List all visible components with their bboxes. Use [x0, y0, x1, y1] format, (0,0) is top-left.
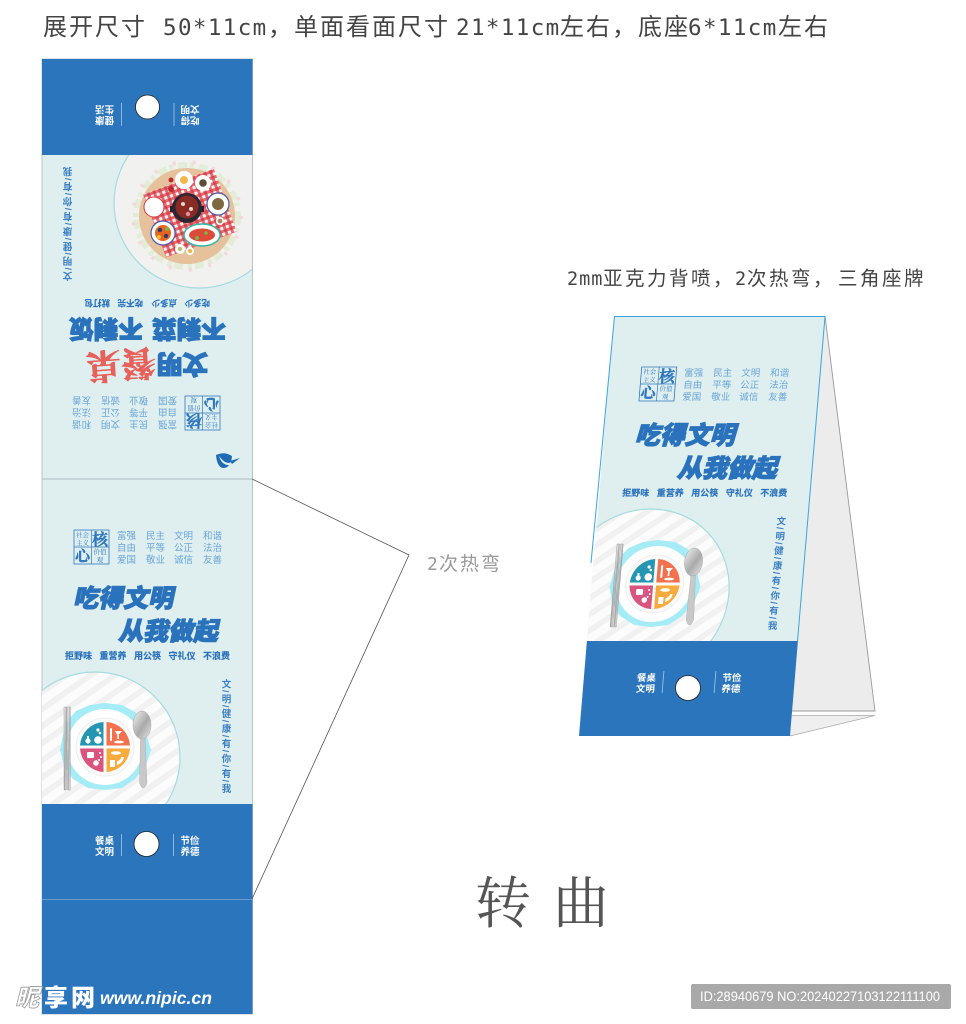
values list: 自由: [683, 379, 703, 391]
title: [630, 421, 786, 483]
fold line: middle: [42, 478, 252, 480]
band: top blue: [42, 59, 252, 155]
sub slogans: 点多少: [151, 298, 177, 308]
sub slogans: 拒野味: [65, 650, 92, 661]
slogan: no leftovers: 不剩菜: [152, 314, 226, 343]
sub slogans: 守礼仪: [168, 650, 196, 661]
upside-down panel content: [63, 166, 226, 430]
lower band text: right: [180, 835, 200, 858]
title: 吃得文明: [633, 421, 741, 450]
values list: 敬业: [711, 391, 731, 403]
page heading: [43, 14, 830, 41]
fold label: 次热弯: [439, 553, 502, 575]
seal: core values: 社会: [643, 367, 657, 376]
band text: left: [635, 672, 657, 695]
stand: base: [790, 715, 875, 736]
seal: core values: 观: [97, 555, 104, 564]
vertical slogan: 文/明/健/康/有/你/有/我: [765, 515, 787, 631]
watermark: ID box: [691, 984, 951, 1009]
sub slogans: 就打包: [84, 298, 110, 308]
watermark: site logo: 网: [71, 985, 95, 1012]
seal: core values: 心: [75, 548, 92, 565]
values list: 民主: [713, 367, 733, 379]
page heading: 21*11cm: [456, 15, 561, 41]
title: 从我做起: [117, 618, 223, 646]
top band text: right: [180, 103, 200, 126]
sub slogans: 不浪费: [203, 650, 230, 661]
values list: [117, 530, 223, 566]
values list: 法治: [203, 542, 222, 554]
band text: left: 文明: [635, 683, 655, 695]
sub slogans: [622, 487, 788, 498]
values list: 法治: [769, 379, 789, 391]
title: wenming: 文明: [157, 349, 208, 378]
watermark: site logo: 享: [44, 984, 68, 1012]
title: [72, 584, 223, 646]
values list: 友善: [203, 554, 223, 566]
seal: core values: 核: [92, 530, 110, 549]
stand: front face: [547, 316, 825, 736]
values list: 富强: [157, 418, 177, 430]
sub slogans: 不浪费: [760, 487, 788, 498]
values list: 和谐: [770, 368, 790, 379]
lower band text: right: 养德: [180, 846, 200, 858]
vertical slogan: 文/明/健/康/有/你/有/我: [63, 166, 74, 282]
top band text: right: 吃得: [180, 114, 200, 126]
arrow: fold lines: [252, 479, 409, 899]
band text: right: 节俭: [722, 672, 742, 684]
logo: bird: [216, 453, 240, 468]
page heading: 底座: [638, 14, 690, 41]
top band text: right: 文明: [180, 103, 200, 115]
page heading: ，: [268, 14, 294, 41]
fold line: base: [42, 898, 252, 900]
watermark: ID box: ID:28940679 NO:20240227103122111100: [700, 988, 940, 1004]
values list: 公正: [174, 543, 194, 554]
page heading: 展开尺寸: [43, 14, 147, 41]
values list: 公正: [100, 406, 120, 417]
values list: 友善: [71, 394, 91, 406]
values list: 法治: [72, 406, 91, 418]
band text: right: 养德: [721, 683, 741, 695]
stand: back panel: [791, 316, 875, 711]
band text: right: [721, 672, 742, 695]
sub slogans: [84, 298, 210, 308]
values list: 爱国: [117, 554, 136, 566]
top band text: left: 生活: [94, 103, 114, 115]
page heading: 50*11cm: [163, 15, 268, 41]
seal: core values: 社会: [204, 421, 218, 430]
seal: core values: 核: [658, 367, 678, 386]
seal: core values: 观: [190, 396, 197, 405]
sub slogans: 守礼仪: [725, 487, 753, 498]
seal: core values: [74, 530, 110, 565]
values list: [71, 394, 177, 430]
material note: 2: [735, 269, 747, 290]
hole: top: [136, 95, 160, 119]
seal: core values: [184, 395, 220, 430]
title: 从我做起: [675, 455, 783, 483]
values list: 平等: [712, 379, 732, 391]
values list: 平等: [128, 406, 148, 418]
band dividers: [662, 671, 716, 693]
values list: 平等: [146, 542, 166, 554]
title: canzhuo calligraphy: 餐桌: [85, 342, 157, 386]
values list: 公正: [740, 380, 760, 391]
values list: 诚信: [739, 391, 759, 403]
lower band text: left: 餐桌: [95, 835, 115, 847]
lower band dividers: [122, 834, 174, 856]
values list: 爱国: [158, 394, 177, 406]
seal: core values: [639, 367, 678, 402]
top band text: left: 健康: [94, 114, 114, 126]
front panel content: [10, 530, 231, 842]
values list: 文明: [101, 418, 120, 430]
hole: lower: [134, 832, 159, 856]
seal: core values: 价值: [187, 404, 200, 413]
values list: 友善: [768, 391, 788, 403]
slogan: no leftovers: [69, 314, 226, 343]
material note: 三角座牌: [838, 268, 926, 290]
watermark: site logo: www.nipic.cn: [100, 988, 212, 1008]
values list: 爱国: [682, 391, 702, 403]
lower band text: left: 文明: [95, 846, 114, 858]
band: lower blue: [42, 804, 252, 1014]
watermark: site logo: [15, 984, 212, 1012]
material note: [567, 268, 926, 290]
sub slogans: 用公筷: [691, 487, 719, 498]
title: 吃得文明: [72, 584, 178, 613]
band text: left: 餐桌: [636, 672, 657, 684]
values list: 文明: [741, 367, 761, 379]
values list: 民主: [146, 530, 165, 542]
hole: stand: [676, 676, 700, 700]
sub slogans: 重营养: [656, 487, 684, 498]
values list: 文明: [174, 530, 193, 542]
page heading: 单面看面尺寸: [294, 14, 450, 41]
seal: core values: 价值: [659, 384, 673, 393]
seal: core values: 观: [662, 392, 669, 401]
values list: 富强: [684, 367, 704, 379]
page heading: 左右，: [560, 14, 638, 41]
values list: 和谐: [71, 418, 91, 429]
seal: core values: 核: [184, 411, 202, 430]
lower band text: right: 节俭: [180, 835, 200, 847]
top band text: left: [94, 103, 114, 126]
page heading: 6*11cm: [688, 15, 778, 41]
values list: 诚信: [174, 554, 193, 566]
values list: 富强: [117, 530, 137, 542]
slogan: no leftovers: 不剩饭: [69, 314, 143, 343]
sub slogans: 吃多少: [184, 298, 210, 308]
top band dividers: [122, 103, 174, 126]
watermark: site logo: 昵: [15, 985, 43, 1012]
seal: core values: 主义: [642, 375, 657, 384]
values list: 和谐: [203, 531, 223, 542]
mockup: triangular table stand: [547, 316, 875, 736]
seal: core values: 社会: [76, 530, 90, 539]
material note: 2mm: [567, 269, 603, 290]
sub slogans: 吃不完: [117, 298, 143, 308]
outline label: 转曲: [475, 874, 631, 936]
page heading: 左右: [778, 14, 830, 41]
values list: 自由: [117, 542, 136, 554]
seal: core values: 心: [202, 395, 219, 412]
plate: picnic table illustration: [113, 155, 252, 289]
values list: 敬业: [129, 394, 148, 406]
values list: 诚信: [101, 394, 120, 406]
fold label: 2: [427, 554, 438, 575]
material note: 亚克力背喷，: [603, 268, 735, 290]
panel: flat unfolded strip: [42, 58, 253, 1014]
lower band text: left: [95, 835, 115, 858]
seal: core values: 主义: [76, 538, 90, 547]
values list: 敬业: [146, 554, 165, 566]
values list: 民主: [129, 418, 148, 430]
sub slogans: 重营养: [100, 650, 127, 661]
plate: place setting: [552, 509, 736, 679]
seal: core values: 主义: [204, 413, 218, 422]
vertical slogan: 文/明/健/康/有/你/有/我: [220, 678, 231, 794]
stand: light blue edge: [591, 316, 825, 641]
values list: 自由: [158, 406, 177, 418]
sub slogans: 拒野味: [622, 487, 650, 498]
plate: place setting: [10, 672, 180, 842]
sub slogans: [65, 650, 230, 661]
seal: core values: 心: [640, 385, 658, 402]
sub slogans: 用公筷: [134, 650, 161, 661]
values list: [682, 367, 790, 403]
seal: core values: 价值: [94, 547, 107, 556]
material note: 次热弯，: [747, 268, 835, 290]
